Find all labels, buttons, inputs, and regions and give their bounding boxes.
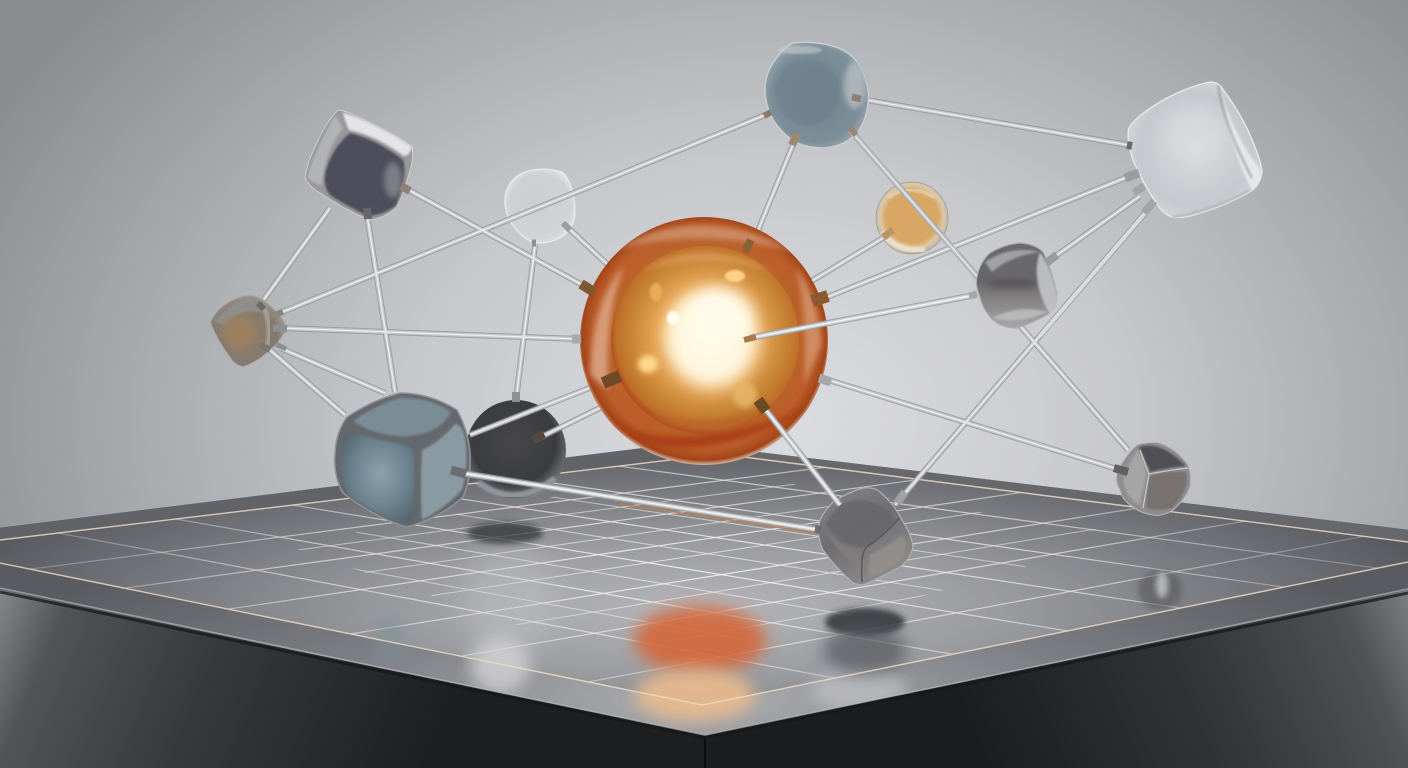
node: large frosted cube (1128, 82, 1262, 218)
node: amber glass sphere (876, 182, 948, 254)
node: dark glass sphere (466, 400, 566, 500)
platform top surface (0, 448, 1408, 735)
node: small bronze cube left (210, 295, 287, 367)
platform inset border (0, 454, 1408, 705)
platform side faces (0, 586, 1408, 768)
node: steel cube center right (976, 243, 1058, 328)
node: core orange sphere (580, 217, 828, 465)
node: large blue cube left (335, 393, 470, 527)
floor reflections (374, 522, 1182, 721)
node: dark cube upper left (305, 110, 413, 220)
major grid lines (31, 466, 1377, 682)
node: top blue-gray cube (765, 42, 868, 148)
platform front edge highlight (0, 588, 1408, 735)
node: gray cube lower center (819, 488, 913, 585)
minor grid lines (298, 484, 1097, 628)
node: clear glass sphere (505, 169, 575, 243)
rod connectors (258, 97, 1154, 530)
node: small cube lower right (1116, 442, 1191, 515)
connecting glass rods (262, 98, 1152, 505)
front glass rods (455, 130, 1152, 533)
